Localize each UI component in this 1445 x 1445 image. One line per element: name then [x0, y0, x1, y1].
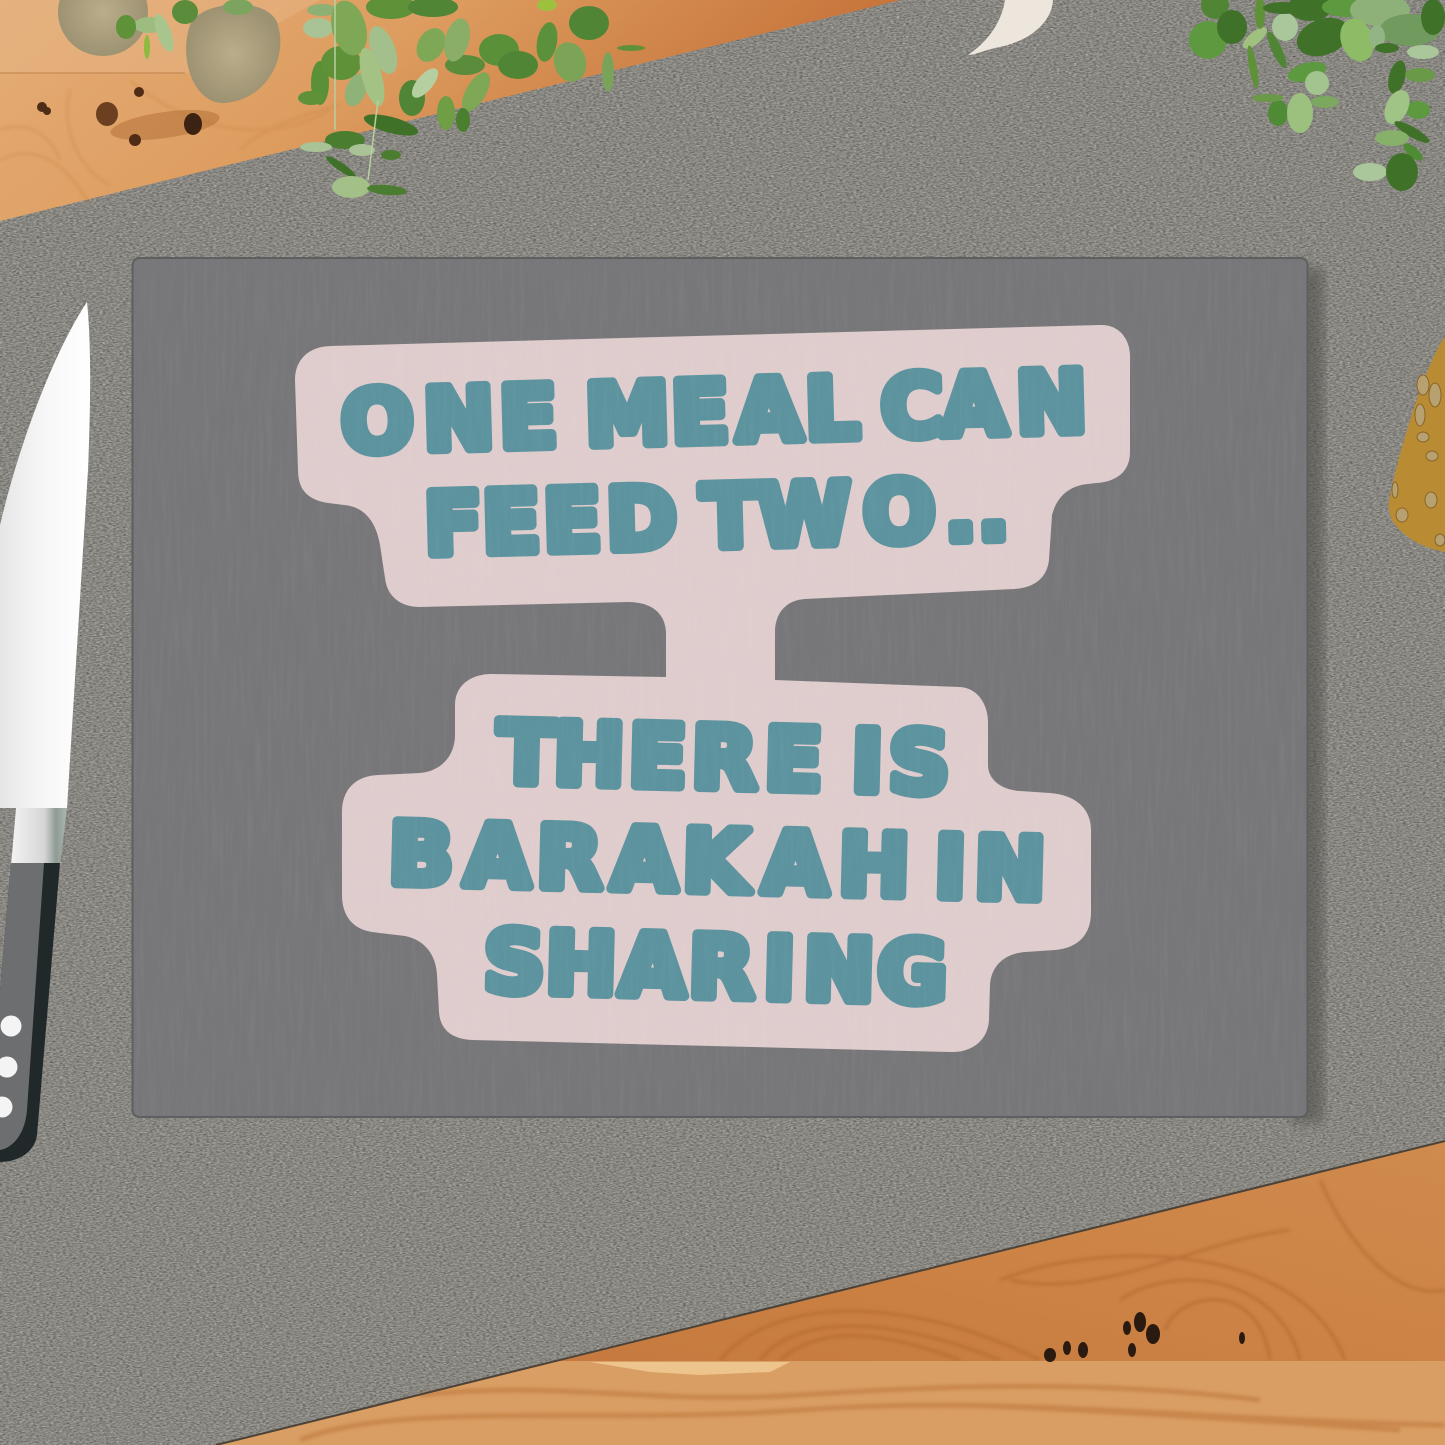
heading: sharing: SHARING [482, 913, 949, 1023]
icon: garlic [968, 0, 1053, 55]
pink label shape [295, 325, 1130, 1052]
icon: knife [0, 302, 90, 1162]
knife bolster [11, 808, 67, 866]
heading: there is: THERE IS [496, 704, 951, 814]
heading: feed two: FEED TWO.. [423, 461, 1011, 575]
panel: glass cutting board [132, 258, 1308, 1117]
knife rivets [0, 1016, 22, 1118]
cutting board shadow [1290, 268, 1324, 1123]
wood surface: bottom right [216, 1141, 1445, 1445]
heading: barakah in: BARAKAH IN [387, 805, 1047, 920]
icon: herb sprig top right [1189, 0, 1445, 191]
knife blade [0, 302, 90, 808]
icon: potatoes [58, 0, 280, 103]
icon: herb sprig top left [116, 0, 645, 198]
heading: one meal can: ONE MEAL CAN [340, 353, 1088, 473]
wood surface: top left [0, 0, 900, 221]
icon: bread slice [1389, 337, 1445, 552]
knife handle [0, 863, 60, 1162]
